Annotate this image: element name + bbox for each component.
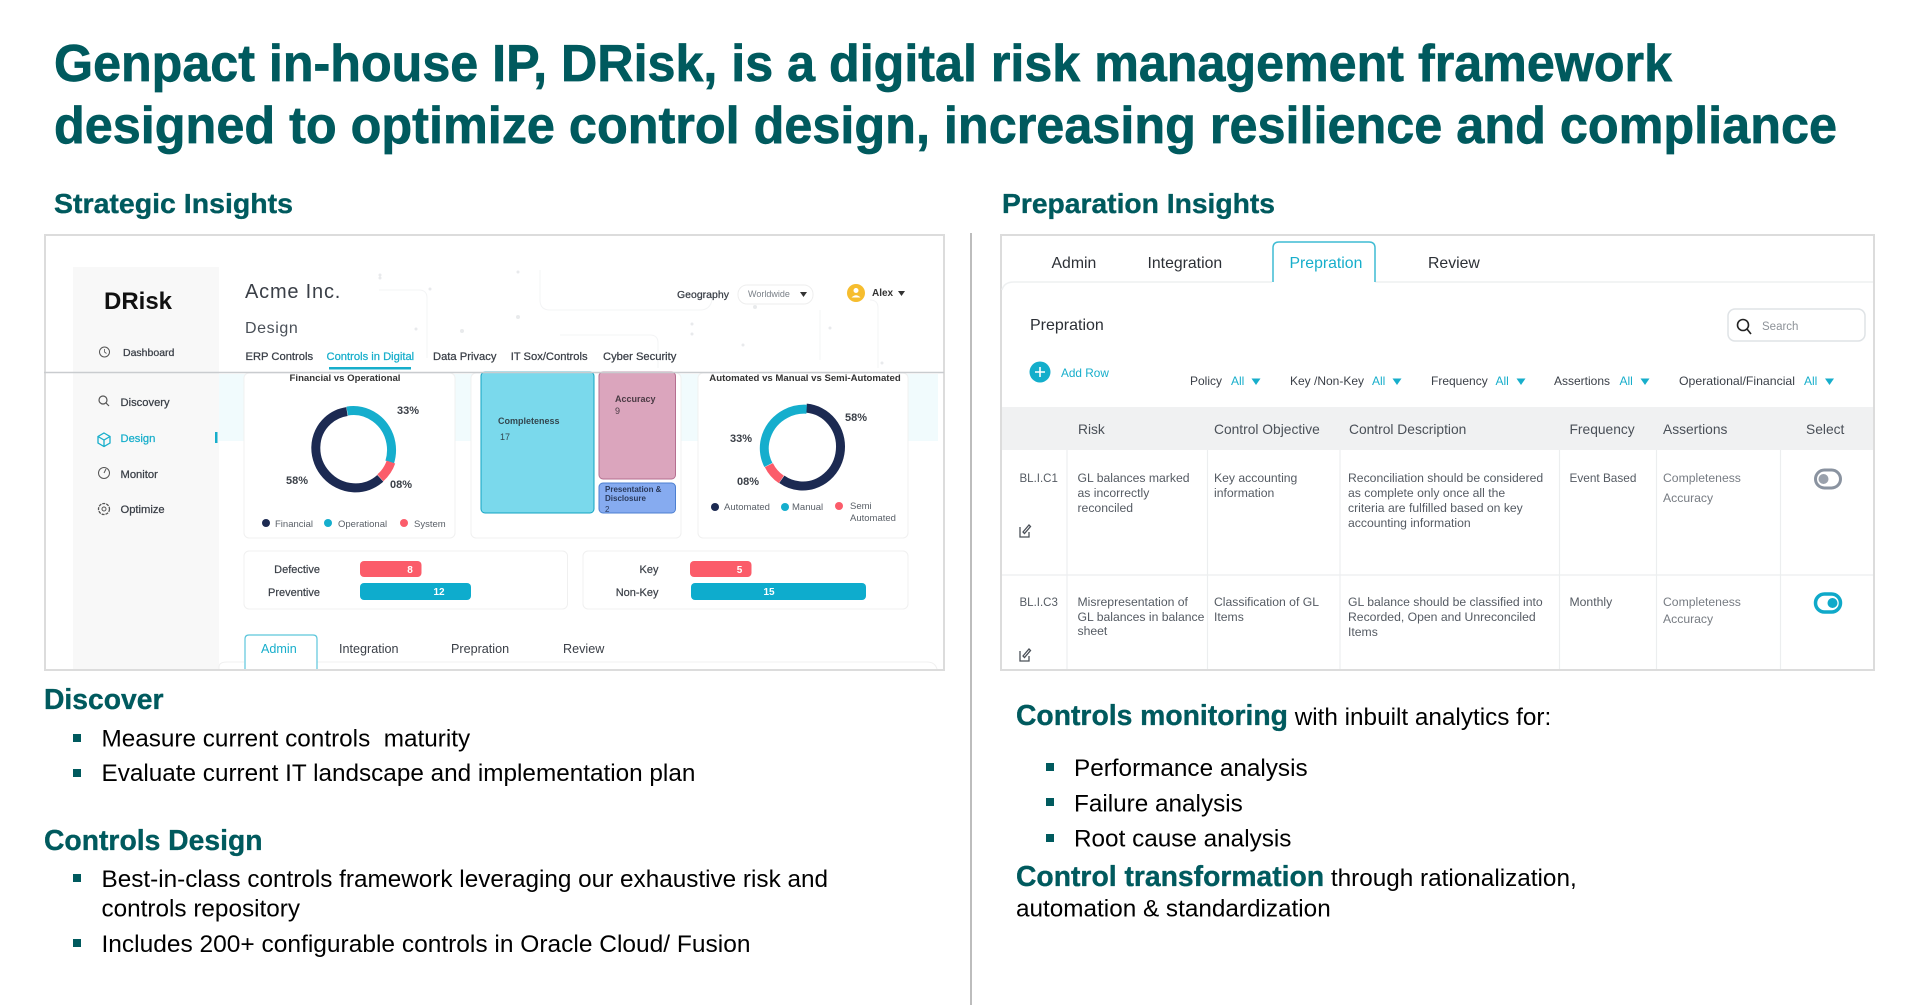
stage tabs: Review: [1428, 255, 1480, 272]
user menu: Alex: [872, 288, 894, 299]
card: financial vs operational donut: System: [414, 519, 446, 530]
table: Assertions: [1663, 422, 1728, 437]
table row 1: Key accounting: [1214, 471, 1297, 485]
text block: controls monitoring: Root cause analysis: [1074, 826, 1291, 852]
text block: controls design: Controls Design: [44, 824, 263, 856]
table row 1: BL.I.C1: [1020, 473, 1058, 485]
title: Genpact in-house IP, DRisk, is a digital risk management framework: [54, 35, 1672, 93]
module tabs: Cyber Security: [603, 351, 677, 363]
card: financial vs operational donut: [244, 373, 455, 538]
search box: [1728, 309, 1865, 341]
table row 1: criteria are fulfilled based on key: [1348, 501, 1524, 515]
card: key vs non-key bars: Key: [640, 564, 659, 576]
text block: control transformation: [1016, 860, 1577, 922]
card: treemap: 9: [615, 406, 620, 416]
table row 1: Reconciliation should be considered: [1348, 471, 1543, 485]
table: Risk: [1078, 422, 1105, 437]
table row 2: GL balance should be classified into: [1348, 595, 1543, 609]
card: treemap: 2: [605, 505, 610, 514]
section heading: Prepration: [1030, 317, 1104, 334]
panel: preparation screenshot: [1001, 235, 1874, 670]
table row 2: sheet: [1078, 624, 1108, 638]
title: [54, 35, 1837, 155]
card: financial vs operational donut: 08%: [390, 479, 412, 491]
filters: Key /Non-Key: [1290, 374, 1364, 388]
text block: controls design: [44, 824, 828, 958]
card: defective vs preventive bars: 12: [433, 587, 445, 598]
table row 1: as complete only once all the: [1348, 486, 1505, 500]
card: automated vs manual donut: [698, 373, 908, 538]
stage tabs: Integration: [339, 642, 399, 656]
nav: design: Design: [120, 433, 155, 445]
filters: [1190, 374, 1834, 388]
card: automated vs manual donut: Automated vs Manual vs Semi-Automated: [709, 373, 901, 384]
table: Control Objective: [1214, 422, 1320, 437]
table row 1: reconciled: [1078, 501, 1133, 515]
title: designed to optimize control design, increasing resilience and compliance: [54, 97, 1837, 155]
card: treemap: Disclosure: [605, 494, 646, 503]
filters: Operational/Financial: [1679, 374, 1795, 388]
card: financial vs operational donut: 58%: [286, 475, 308, 487]
card: automated vs manual donut: Automated: [724, 502, 770, 513]
text block: controls monitoring: Performance analysis: [1074, 755, 1308, 782]
card: key vs non-key bars: 5: [737, 565, 743, 576]
card: financial vs operational donut: Operational: [338, 519, 387, 530]
card: key vs non-key bars: [583, 551, 908, 609]
page name: Design: [245, 320, 298, 337]
stage tabs: Admin: [1052, 255, 1096, 272]
text block: discover: Measure current controls maturity: [102, 726, 471, 752]
panel: strategic dashboard screenshot: [44, 235, 944, 670]
text block: controls design: Best-in-class controls framework leveraging our exhaustive risk and: [102, 866, 828, 893]
filters: All: [1804, 374, 1817, 388]
filters: Policy: [1190, 374, 1222, 388]
nav: monitor: [98, 468, 158, 481]
table row 1: accounting information: [1348, 516, 1471, 530]
nav: discovery: Discovery: [120, 397, 170, 409]
add row button: Add Row: [1061, 366, 1109, 380]
text block: controls monitoring: [1016, 699, 1551, 852]
card: defective vs preventive bars: Preventive: [268, 587, 320, 599]
stage tabs: [1002, 242, 1873, 290]
module tabs: Controls in Digital: [326, 351, 414, 363]
filters: Assertions: [1554, 374, 1610, 388]
heading: strategic insights: Strategic Insights: [54, 188, 293, 219]
module tabs: IT Sox/Controls: [511, 351, 588, 363]
card: treemap: Presentation &: [605, 485, 662, 494]
card: defective vs preventive bars: [244, 551, 568, 609]
nav: design: [98, 432, 218, 447]
card: automated vs manual donut: Manual: [792, 502, 823, 513]
stage tabs: [219, 635, 937, 669]
pale band behind charts: [219, 374, 938, 441]
card: key vs non-key bars: 15: [763, 587, 775, 598]
add row button: [1030, 362, 1109, 382]
filters: Frequency: [1431, 374, 1488, 388]
card: key vs non-key bars: Non-Key: [616, 587, 659, 599]
stage tabs: Admin: [261, 642, 297, 656]
card: financial vs operational donut: 33%: [397, 405, 419, 417]
stage tabs: Prepration: [1290, 255, 1362, 272]
geography filter: Geography: [677, 289, 730, 301]
text block: control transformation: automation & standardization: [1016, 896, 1331, 922]
nav: optimize: Optimize: [120, 504, 165, 516]
table row 1: as incorrectly: [1078, 486, 1150, 500]
sidebar: [73, 267, 219, 669]
filters: All: [1620, 374, 1633, 388]
stage tabs: Prepration: [451, 642, 509, 656]
text block: discover: Evaluate current IT landscape and implementation plan: [102, 760, 695, 787]
heading: preparation insights: Preparation Insights: [1002, 188, 1275, 219]
nav: dashboard: Dashboard: [123, 347, 175, 359]
card: defective vs preventive bars: 8: [407, 565, 413, 576]
table row 2: Accuracy: [1663, 612, 1714, 626]
table: Select: [1806, 422, 1845, 437]
table row 1: Accuracy: [1663, 491, 1714, 505]
card: treemap: [471, 372, 681, 538]
card: treemap: Accuracy: [615, 394, 656, 404]
card: financial vs operational donut: Financial vs Operational: [290, 373, 400, 384]
text block: control transformation: Control transformation through rationalization,: [1016, 860, 1577, 892]
table row 1: information: [1214, 486, 1274, 500]
table: Control Description: [1349, 422, 1466, 437]
table row 2: Classification of GL: [1214, 595, 1319, 609]
nav: discovery: [99, 396, 170, 409]
table row 2: Items: [1348, 625, 1378, 639]
table row 2: Items: [1214, 610, 1244, 624]
table: [1002, 407, 1873, 669]
search box: Search: [1762, 321, 1798, 333]
card: treemap: 17: [500, 432, 510, 442]
filters: All: [1496, 374, 1509, 388]
card: automated vs manual donut: Semi: [850, 501, 872, 512]
table row 2: Recorded, Open and Unreconciled: [1348, 610, 1536, 624]
card: automated vs manual donut: 08%: [737, 476, 759, 488]
text block: discover: Discover: [44, 683, 164, 715]
text block: controls design: controls repository: [102, 896, 301, 922]
text block: discover: [44, 683, 695, 787]
table row 1: [1020, 470, 1840, 537]
table row 2: [1020, 594, 1840, 661]
table row 1: Event Based: [1570, 471, 1636, 485]
card: automated vs manual donut: 58%: [845, 412, 867, 424]
geography filter: [677, 285, 813, 304]
table row 2: Monthly: [1570, 595, 1613, 609]
stage tabs: Review: [563, 642, 605, 656]
card: financial vs operational donut: Financial: [275, 519, 313, 530]
user menu: [847, 284, 905, 302]
filters: All: [1231, 374, 1244, 388]
table row 1: GL balances marked: [1078, 471, 1190, 485]
table row 2: BL.I.C3: [1020, 597, 1058, 609]
company name: Acme Inc.: [245, 281, 341, 303]
table row 2: Completeness: [1663, 595, 1741, 609]
card: treemap: Completeness: [498, 416, 560, 426]
nav: optimize: [98, 504, 165, 516]
card: automated vs manual donut: 33%: [730, 433, 752, 445]
module tabs: [246, 351, 677, 370]
card: automated vs manual donut: Automated: [850, 513, 896, 524]
geography filter: Worldwide: [748, 289, 790, 299]
nav: monitor: Monitor: [120, 469, 158, 481]
module tabs: ERP Controls: [246, 351, 313, 363]
text block: controls monitoring: Failure analysis: [1074, 790, 1243, 818]
text block: controls design: Includes 200+ configurable controls in Oracle Cloud/ Fusion: [102, 931, 750, 958]
text block: controls monitoring: Controls monitoring with inbuilt analytics for:: [1016, 699, 1551, 731]
stage tabs: Integration: [1148, 255, 1222, 272]
filters: All: [1372, 374, 1385, 388]
module tabs: Data Privacy: [433, 351, 497, 363]
table row 2: GL balances in balance: [1078, 610, 1205, 624]
logo: DRisk: [104, 288, 173, 315]
table row 2: Misrepresentation of: [1078, 595, 1189, 609]
table: Frequency: [1570, 422, 1635, 437]
nav: dashboard: [100, 347, 175, 359]
table row 1: Completeness: [1663, 471, 1741, 485]
card: defective vs preventive bars: Defective: [274, 564, 320, 576]
